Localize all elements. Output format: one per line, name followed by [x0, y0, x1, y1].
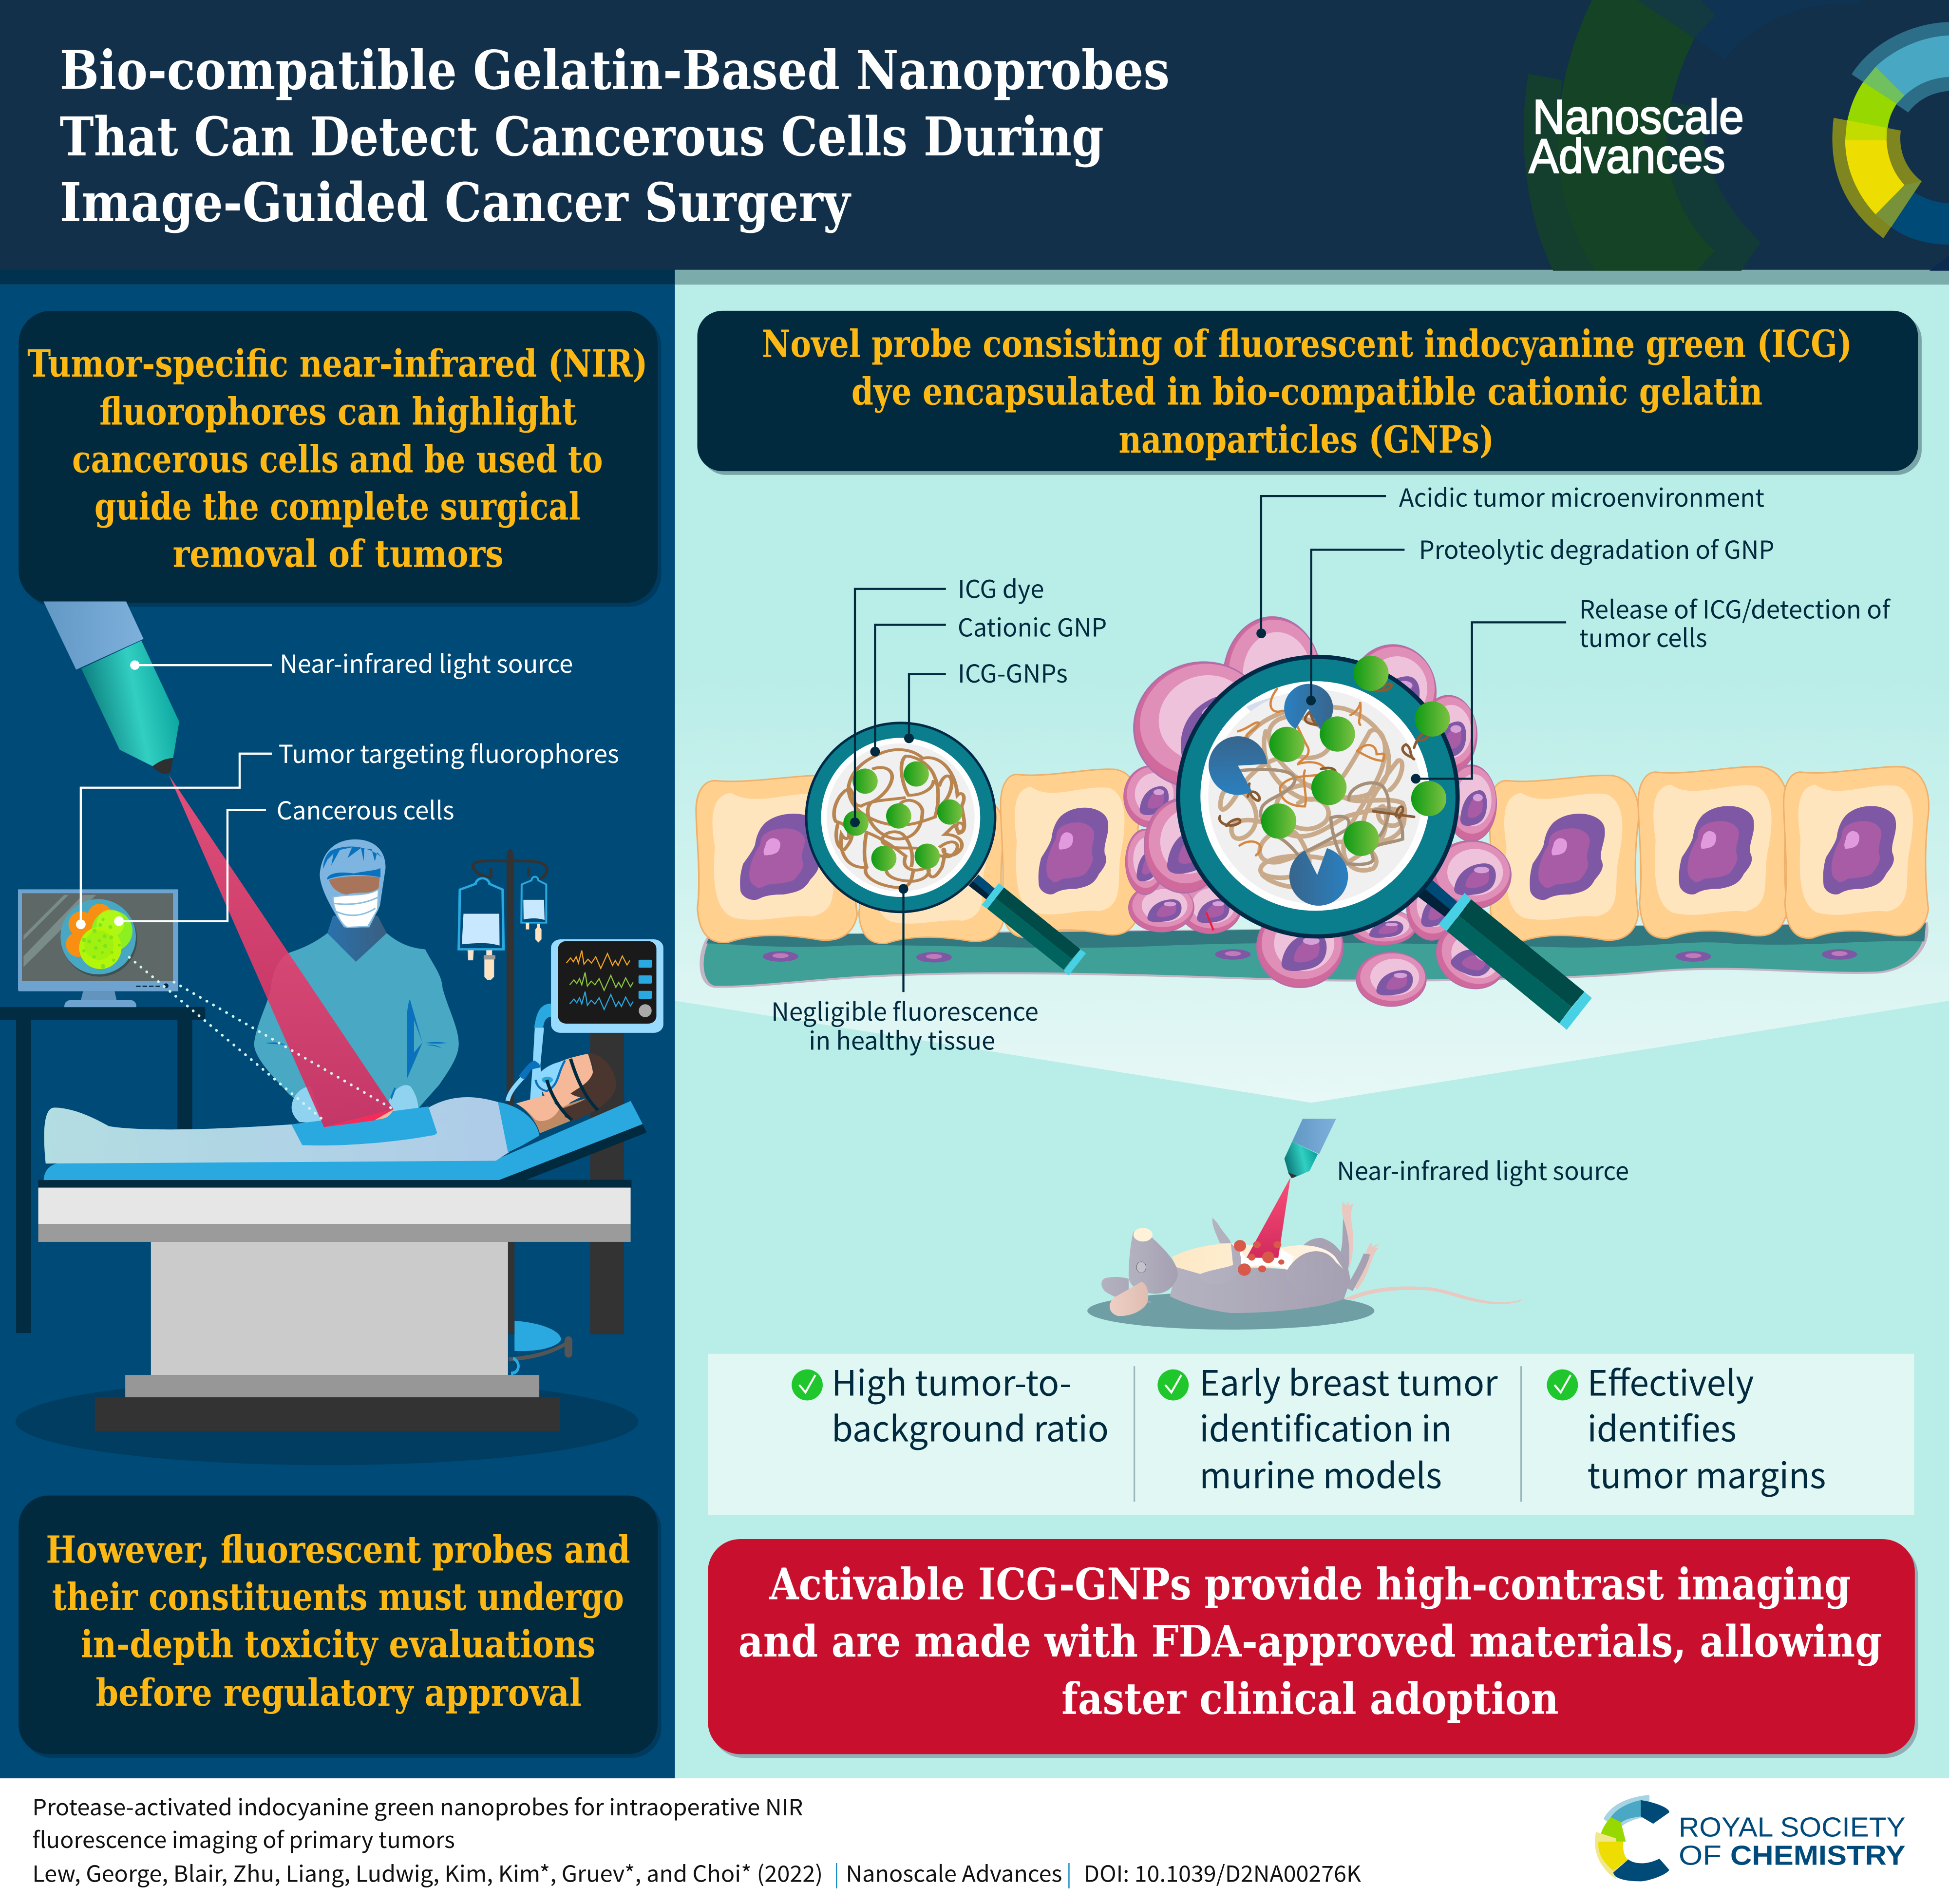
- journal name: Nanoscale Advances: Advances: [1529, 130, 1725, 184]
- lens: [1176, 655, 1460, 938]
- surgeon: [254, 839, 459, 1124]
- body: [1170, 1238, 1350, 1313]
- callout: near-infrared light source: [130, 644, 573, 680]
- left top callout: fluorophores can highlight: [99, 390, 577, 434]
- tumor cell cluster: [1116, 617, 1518, 1007]
- right top callout: dye encapsulated in bio-compatible cationic gelatin: [852, 370, 1762, 414]
- floor shadow: [16, 1378, 638, 1465]
- callout: negligible fluorescence: [771, 884, 1039, 1057]
- left top callout: removal of tumors: [173, 533, 503, 576]
- Royal Society of Chemistry wordmark: [1679, 1811, 1906, 1871]
- benefit 3: Effectively: [1587, 1355, 1754, 1406]
- surgical table side table: [0, 1007, 205, 1333]
- citation: Protease-activated indocyanine green nanoprobes for intraoperative NIR: [32, 1790, 803, 1822]
- citation: [32, 1790, 1361, 1888]
- small magnifier: healthy tissue: [805, 722, 1086, 975]
- benefits panel: [708, 1354, 1914, 1515]
- left top callout: [19, 311, 661, 607]
- benefit 2: murine models: [1199, 1447, 1442, 1498]
- vitals monitor: [530, 939, 663, 1334]
- title: That Can Detect Cancerous Cells During: [59, 105, 1104, 168]
- callout: cationic GNP: [870, 608, 1107, 757]
- callout: tumor targeting fluorophores: [76, 734, 619, 929]
- tumors: [1234, 1240, 1285, 1276]
- header watermark logo: [1524, 0, 1949, 271]
- title: [59, 38, 1170, 234]
- callout: ICG dye: ICG dye: [958, 569, 1044, 605]
- footer background: [0, 1778, 1949, 1904]
- operating table: [38, 1180, 631, 1431]
- citation: Nanoscale Advances: [846, 1856, 1062, 1888]
- patient: [44, 1053, 646, 1180]
- large magnifier: tumor tissue: [1176, 655, 1592, 1030]
- right top callout: nanoparticles (GNPs): [1118, 418, 1494, 462]
- belly: [1172, 1243, 1350, 1280]
- title: Bio-compatible Gelatin-Based Nanoprobes: [59, 38, 1170, 101]
- monitor with tumor image: [18, 889, 178, 1007]
- journal name: Nanoscale Advances: Nanoscale: [1533, 90, 1744, 144]
- conclusion banner: faster clinical adoption: [1061, 1673, 1559, 1724]
- limbs: [1342, 1201, 1380, 1290]
- callout: cationic GNP: Cationic GNP: [958, 608, 1107, 644]
- callout: cancerous cells: Cancerous cells: [277, 791, 454, 827]
- title: Image-Guided Cancer Surgery: [59, 171, 852, 234]
- operating room illustration: [0, 602, 663, 1465]
- left top callout: Tumor-specific near-infrared (NIR): [27, 342, 647, 386]
- left bottom callout: However, fluorescent probes and: [46, 1528, 630, 1572]
- right panel background: [675, 285, 1949, 1778]
- Royal Society of Chemistry wordmark: ROYAL SOCIETY: [1679, 1811, 1906, 1842]
- near-infrared beam: [169, 775, 394, 1127]
- callout: negligible fluorescence: Negligible fluorescence: [771, 992, 1039, 1028]
- tail: [1344, 1286, 1521, 1304]
- ICG-GNP spheres: [1261, 656, 1450, 856]
- journal name: Nanoscale Advances: [1529, 90, 1744, 184]
- callout: proteolytic degradation: Proteolytic degradation of GNP: [1419, 530, 1774, 566]
- light source: [1292, 1119, 1336, 1154]
- lens: [805, 722, 996, 913]
- benefit 2: Early breast tumor: [1199, 1355, 1498, 1406]
- Royal Society of Chemistry wordmark: CHEMISTRY: [1730, 1840, 1906, 1871]
- gelatin tangle: [834, 750, 965, 888]
- dotted magnification lines: [129, 957, 393, 1119]
- head: [1129, 1231, 1178, 1294]
- callout: acidic tumor microenvironment: Acidic tumor microenvironment: [1399, 478, 1764, 514]
- light source handpiece: [43, 602, 179, 774]
- benefit 3: identifies: [1587, 1401, 1737, 1452]
- callout: negligible fluorescence: in healthy tissue: [809, 1021, 995, 1057]
- citation: fluorescence imaging of primary tumors: [32, 1823, 455, 1855]
- ICG-GNP spheres: [843, 762, 963, 871]
- citation: DOI: 10.1039/D2NA00276K: [1084, 1856, 1361, 1888]
- benefit 1: [792, 1355, 1109, 1452]
- beam: [1247, 1178, 1290, 1258]
- Royal Society of Chemistry wordmark: OF: [1679, 1840, 1722, 1871]
- benefit 3: [1547, 1355, 1826, 1498]
- tissue with healthy and tumor cells: [696, 617, 1929, 1007]
- journal ring logo: [1832, 22, 1949, 245]
- callout: release of ICG: Release of ICG/detection of: [1579, 590, 1891, 626]
- tangled gelatin: [1220, 706, 1405, 887]
- handle: [1418, 880, 1592, 1030]
- handle: [968, 875, 1086, 975]
- left bottom callout: in-depth toxicity evaluations: [81, 1622, 595, 1666]
- callout: acidic tumor microenvironment: [1256, 478, 1764, 638]
- callout: release of ICG: tumor cells: [1579, 618, 1707, 654]
- left bottom callout: their constituents must undergo: [52, 1575, 624, 1619]
- left top callout: cancerous cells and be used to: [72, 438, 603, 482]
- callout: release of ICG: [1411, 590, 1891, 783]
- callout: ICG-GNPs: ICG-GNPs: [958, 654, 1068, 690]
- mouse model illustration: [1087, 1119, 1521, 1330]
- header band: [0, 0, 1949, 285]
- callout: ICG dye: [850, 569, 1044, 827]
- label: near-infrared light source: Near-infrared light source: [1337, 1151, 1629, 1187]
- callout: ICG-GNPs: [904, 654, 1068, 743]
- left panel background: [0, 285, 675, 1778]
- ears: [1101, 1277, 1153, 1303]
- callout: cancerous cells: [114, 791, 454, 926]
- benefit 2: identification in: [1199, 1401, 1452, 1452]
- right top callout: [697, 311, 1922, 475]
- callout: tumor targeting fluorophores: Tumor targeting fluorophores: [279, 734, 619, 770]
- healthy cells: [696, 767, 1929, 943]
- left bottom callout: [19, 1496, 661, 1758]
- shadow: [1087, 1292, 1374, 1330]
- Royal Society of Chemistry logo mark: [1595, 1795, 1669, 1881]
- benefit 1: background ratio: [832, 1401, 1109, 1452]
- IV pole and bags: [459, 849, 547, 1112]
- protease enzymes: [1209, 684, 1348, 906]
- callout: near-infrared light source: Near-infrared light source: [280, 644, 573, 680]
- conclusion banner: [708, 1539, 1918, 1758]
- basement membrane: [701, 923, 1927, 987]
- left bottom callout: before regulatory approval: [95, 1671, 582, 1715]
- benefit 3: tumor margins: [1587, 1447, 1826, 1498]
- benefit 1: High tumor-to-: [832, 1355, 1072, 1406]
- left top callout: guide the complete surgical: [95, 485, 581, 529]
- callout: proteolytic degradation: [1306, 530, 1774, 705]
- citation: Lew, George, Blair, Zhu, Liang, Ludwig, Kim, Kim*, Gruev*, and Choi* (2022): [32, 1856, 823, 1888]
- benefit 2: [1157, 1355, 1498, 1498]
